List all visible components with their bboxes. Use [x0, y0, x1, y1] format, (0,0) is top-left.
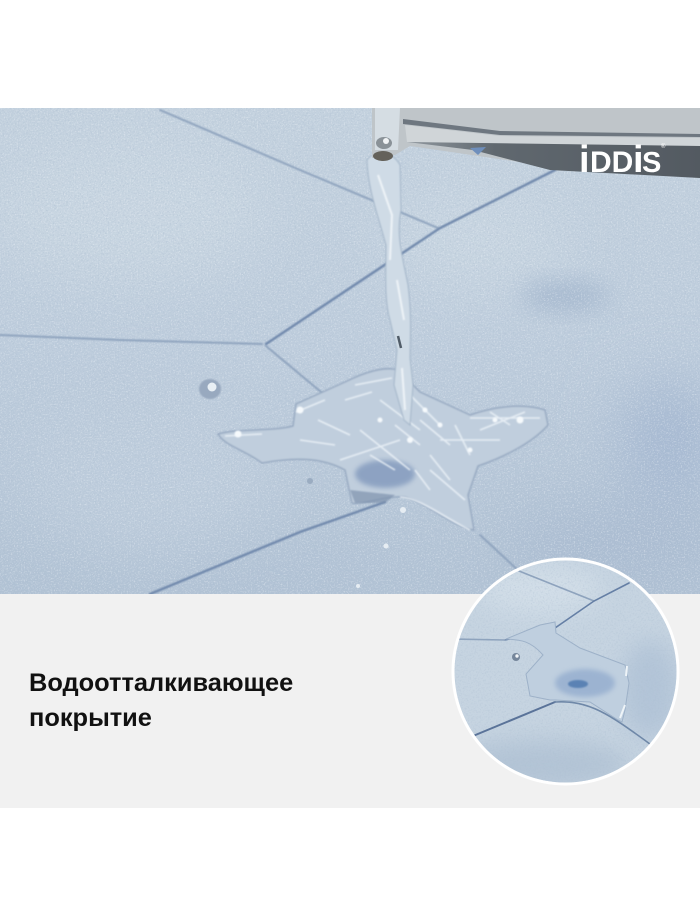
bottom text panel	[0, 594, 700, 808]
tonal shading	[120, 231, 700, 544]
inset circle: water beading	[450, 555, 682, 790]
inset puddle	[506, 622, 629, 722]
photo: water pouring on quilted blue mat	[0, 108, 700, 786]
puddle	[218, 369, 548, 530]
glass vessel	[372, 108, 700, 178]
mat seams	[0, 110, 555, 594]
inset seams	[452, 571, 650, 744]
logo: IDDIS: ®	[661, 143, 666, 150]
heading: покрытие	[29, 704, 152, 732]
logo: IDDIS	[579, 139, 666, 176]
heading	[29, 669, 293, 732]
heading: Водоотталкивающее	[29, 669, 293, 697]
droplets	[199, 379, 406, 588]
water stream	[367, 153, 413, 425]
